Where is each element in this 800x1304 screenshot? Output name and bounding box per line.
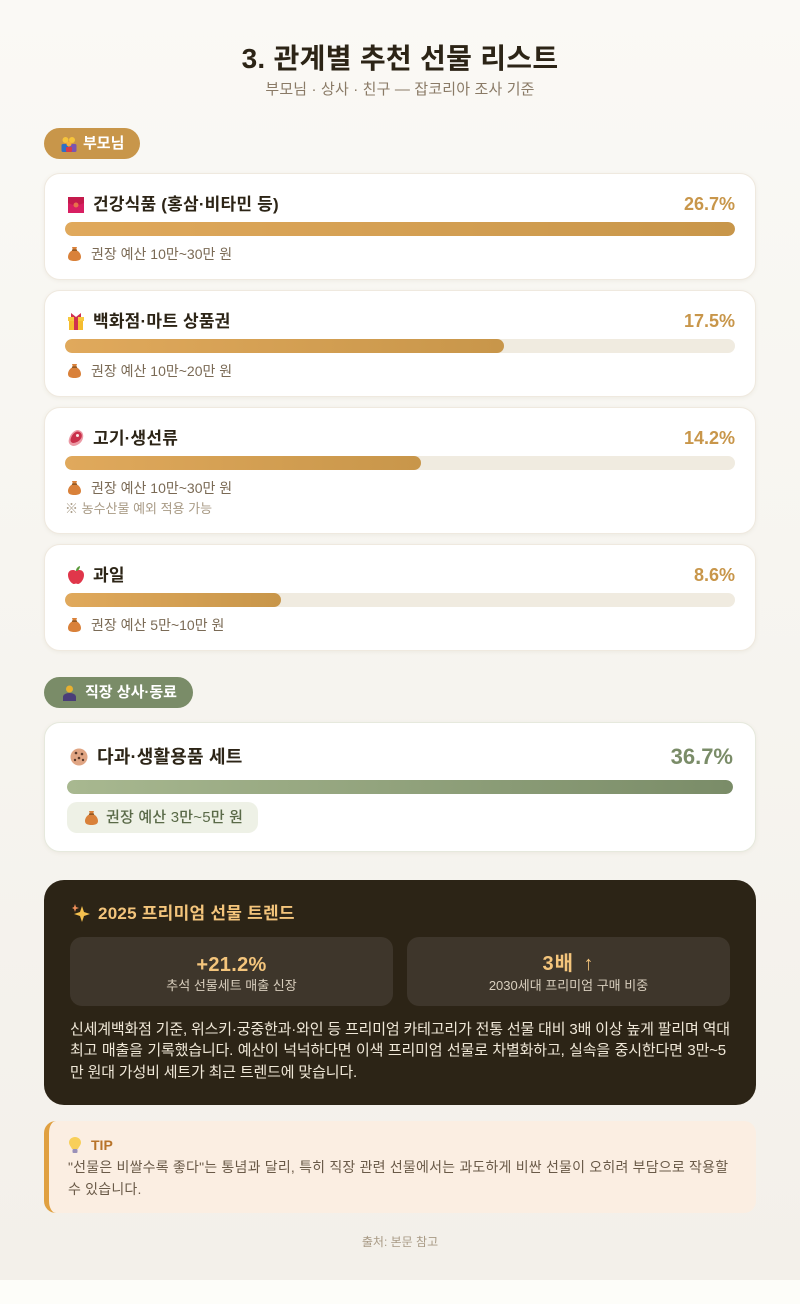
budget text: 권장 예산 10만~30만 원: [91, 246, 232, 262]
icon: gift box: [68, 313, 84, 330]
section pill: boss and colleagues: 직장 상사·동료: [85, 684, 177, 701]
item name: 다과·생활용품 세트: [97, 747, 242, 767]
budget text: 권장 예산 3만~5만 원: [106, 809, 243, 826]
percentage: 17.5%: [684, 311, 735, 331]
budget chip: [67, 802, 258, 833]
stat label: 2030세대 프리미엄 구매 비중: [489, 978, 648, 993]
item name: 건강식품 (홍삼·비타민 등): [93, 195, 279, 214]
card: meat and fish: [44, 407, 756, 534]
stat label: 추석 선물세트 매출 신장: [166, 978, 297, 993]
budget text: 권장 예산 10만~30만 원: [91, 480, 232, 496]
source note: 출처: 본문 참고: [362, 1235, 438, 1249]
percentage: 26.7%: [684, 194, 735, 214]
stat value: 3배 ↑: [542, 953, 595, 975]
icon: family: [62, 137, 76, 152]
trend description: [70, 1020, 730, 1080]
progress bar: [65, 222, 735, 236]
progress bar: [65, 339, 735, 353]
section pill: parents: 부모님: [83, 135, 124, 152]
tip text: "선물은 비쌀수록 좋다"는 통념과 달리, 특히 직장 관련 선물에서는 과도하게 비싼 선물이 오히려 부담으로 작용할: [68, 1159, 728, 1175]
stat: premium purchase share: [407, 937, 730, 1006]
item name: 백화점·마트 상품권: [93, 312, 231, 331]
icon: money bag: [68, 247, 81, 261]
card: fruit: [44, 544, 756, 651]
stat value: +21.2%: [196, 954, 267, 976]
subtitle: 부모님 · 상사 · 친구 — 잡코리아 조사 기준: [265, 81, 535, 98]
section pill: boss and colleagues: [44, 677, 193, 708]
icon: money bag: [68, 618, 81, 632]
icon: cookie: [70, 748, 88, 766]
stat: sales growth: [70, 937, 393, 1006]
icon: money bag: [68, 364, 81, 378]
panel: premium trend: [44, 880, 756, 1105]
icon: money bag: [85, 811, 98, 825]
icon: sparkles: [72, 904, 90, 922]
icon: money bag: [68, 481, 81, 495]
budget text: 권장 예산 5만~10만 원: [91, 617, 224, 633]
tip text: 수 있습니다.: [68, 1181, 142, 1197]
card: snacks and household set: [44, 722, 756, 852]
tip heading: TIP: [91, 1137, 113, 1153]
panel heading: 2025 프리미엄 선물 트렌드: [98, 904, 295, 923]
footnote: ※ 농수산물 예외 적용 가능: [65, 501, 212, 516]
percentage: 14.2%: [684, 428, 735, 448]
percentage: 36.7%: [671, 744, 733, 769]
trend description: 만 원대 가성비 세트가 최근 트렌드에 맞습니다.: [70, 1064, 357, 1080]
progress bar: [67, 780, 733, 794]
title: 3. 관계별 추천 선물 리스트: [242, 43, 558, 74]
budget text: 권장 예산 10만~20만 원: [91, 363, 232, 379]
callout: tip: [44, 1121, 756, 1213]
section pill: parents: [44, 128, 140, 159]
progress bar: [65, 456, 735, 470]
trend description: 최고 매출을 기록했습니다. 예산이 넉넉하다면 이색 프리미엄 선물로 차별화하고, 실속을 중시한다면 3만~5: [70, 1042, 726, 1059]
icon: light bulb: [69, 1137, 81, 1153]
icon: meat: [68, 430, 84, 446]
icon: apple: [68, 566, 84, 584]
icon: office worker: [63, 686, 76, 701]
card: gift card: [44, 290, 756, 397]
item name: 과일: [93, 566, 125, 585]
icon: red envelope: [68, 197, 84, 213]
card: health food: [44, 173, 756, 280]
tip text: [68, 1159, 728, 1197]
item name: 고기·생선류: [93, 429, 178, 448]
percentage: 8.6%: [694, 565, 735, 585]
progress bar: [65, 593, 735, 607]
trend description: 신세계백화점 기준, 위스키·궁중한과·와인 등 프리미엄 카테고리가 전통 선물 대비 3배 이상 높게 팔리며 역대: [70, 1020, 730, 1038]
